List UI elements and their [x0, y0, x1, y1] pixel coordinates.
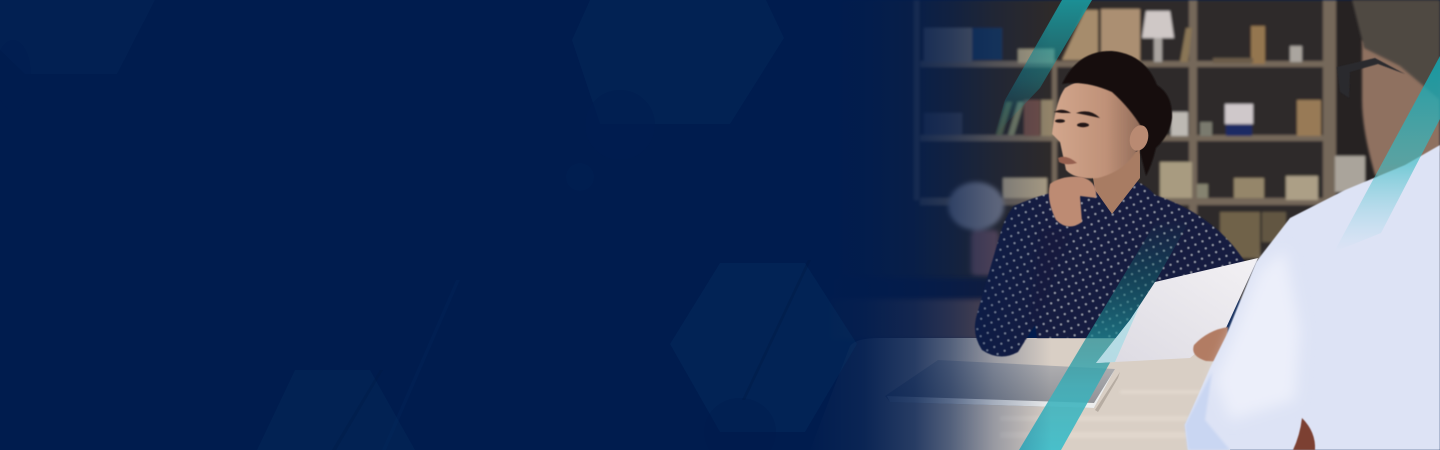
teal accent band: centre [1019, 220, 1190, 450]
decorative hexagons [0, 0, 857, 450]
face [1052, 80, 1142, 178]
shelf frame [914, 0, 1336, 215]
glasses [1337, 58, 1405, 98]
second hand [1293, 418, 1315, 450]
eyes and brows [1054, 110, 1100, 127]
head skin [1362, 40, 1440, 190]
shirt [975, 178, 1245, 357]
photo: woman in polka dot shirt [975, 51, 1245, 357]
hand at chin [1049, 177, 1096, 227]
banner illustration [832, 0, 1440, 450]
mouth [1058, 157, 1077, 164]
shirt [1185, 145, 1440, 450]
photo: table [810, 338, 1230, 450]
navy gradient overlay [0, 0, 1044, 450]
shirt cuff [1185, 372, 1230, 450]
neck [1092, 150, 1140, 214]
photo: laptop [885, 360, 1120, 412]
photo: paper sheet [1096, 258, 1258, 363]
photo: floor and back band [874, 276, 988, 338]
photo: man from behind [1185, 0, 1440, 450]
hair [1352, 0, 1440, 100]
teal accent band: upper [999, 0, 1092, 122]
plant and vase [948, 182, 1004, 276]
shirt highlight [1215, 250, 1300, 420]
hair and bun [1062, 51, 1172, 176]
sleeve fold [1030, 229, 1072, 325]
photo: office wall and bookshelf [912, 0, 1440, 301]
ear [1130, 125, 1148, 151]
shelf objects [924, 9, 1365, 258]
teal accent band: right [1341, 56, 1440, 240]
photo: man's hand holding paper [1193, 327, 1228, 362]
